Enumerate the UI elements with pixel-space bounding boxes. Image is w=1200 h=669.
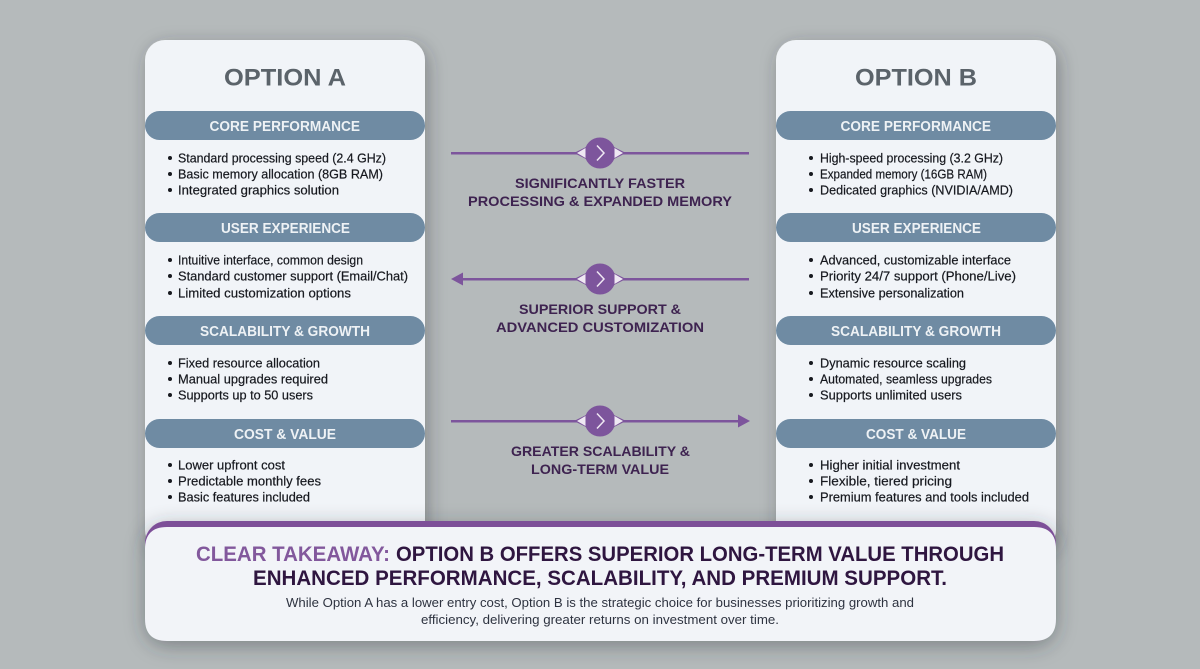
section: user experience A: Intuitive interface, common design — [178, 254, 363, 268]
takeaway headline: ENHANCED PERFORMANCE, SCALABILITY, AND PREMIUM SUPPORT. — [253, 567, 947, 590]
section: core performance A — [145, 111, 425, 198]
section: core performance B: Expanded memory (16GB RAM) — [820, 168, 987, 182]
section: core performance B: CORE PERFORMANCE — [840, 119, 991, 135]
label: connector 1: PROCESSING & EXPANDED MEMORY — [468, 193, 733, 209]
takeaway supporting text: efficiency, delivering greater returns on investment over time. — [421, 613, 779, 627]
section: user experience B: Priority 24/7 support (Phone/Live) — [820, 270, 1016, 284]
label: connector 3: LONG-TERM VALUE — [531, 461, 669, 477]
label: connector 2 — [496, 301, 704, 335]
heading: option B: OPTION B — [855, 64, 977, 92]
takeaway supporting text — [286, 596, 914, 627]
section: cost and value A: Predictable monthly fees — [178, 474, 321, 488]
section: user experience A — [145, 213, 425, 300]
section: core performance A: Standard processing speed (2.4 GHz) — [178, 152, 386, 166]
section: core performance B — [776, 111, 1056, 198]
section: cost and value B: Higher initial investment — [820, 458, 961, 472]
section: cost and value A: Basic features included — [178, 490, 310, 504]
section: cost and value B — [776, 419, 1056, 504]
section: scalability B: Automated, seamless upgrades — [820, 372, 992, 386]
section: core performance A: CORE PERFORMANCE — [210, 119, 360, 135]
section: scalability B: Supports unlimited users — [820, 388, 962, 402]
section: cost and value A: Lower upfront cost — [178, 458, 286, 472]
section: user experience B: Extensive personalization — [820, 286, 964, 300]
section: user experience B: USER EXPERIENCE — [852, 221, 981, 237]
section: scalability B: Dynamic resource scaling — [820, 356, 966, 370]
takeaway headline — [196, 543, 1004, 590]
section: core performance A: Integrated graphics solution — [178, 184, 339, 198]
section: scalability A: SCALABILITY & GROWTH — [200, 324, 370, 340]
section: scalability B: SCALABILITY & GROWTH — [831, 324, 1001, 340]
panel: option B — [776, 40, 1056, 550]
section: core performance B: High-speed processing (3.2 GHz) — [820, 152, 1003, 166]
section: cost and value B: Premium features and tools included — [820, 490, 1029, 504]
section: cost and value A — [145, 419, 425, 504]
label: connector 3 — [511, 443, 690, 477]
takeaway headline: OPTION B OFFERS SUPERIOR LONG-TERM VALUE THROUGH — [396, 543, 1004, 566]
connector 2: superior support, arrow left — [451, 264, 749, 335]
section: scalability A: Fixed resource allocation — [178, 356, 320, 370]
section: scalability A: Supports up to 50 users — [178, 388, 313, 402]
takeaway supporting text: While Option A has a lower entry cost, Option B is the strategic choice for businesses prioritizing growth and — [286, 596, 914, 610]
label: connector 1 — [468, 175, 733, 209]
label: connector 1: SIGNIFICANTLY FASTER — [515, 175, 685, 191]
section: user experience A: Limited customization options — [178, 286, 351, 300]
section: user experience A: USER EXPERIENCE — [221, 221, 350, 237]
section: scalability A: Manual upgrades required — [178, 372, 328, 386]
connector 1: faster processing — [451, 138, 749, 209]
panel: option A — [145, 40, 425, 550]
section: user experience B: Advanced, customizable interface — [820, 254, 1011, 268]
heading: option A: OPTION A — [224, 64, 346, 92]
label: connector 3: GREATER SCALABILITY & — [511, 443, 690, 459]
section: scalability A — [145, 316, 425, 402]
takeaway headline: CLEAR TAKEAWAY: — [196, 543, 390, 566]
connector 3: greater scalability, arrow right — [451, 406, 750, 477]
label: connector 2: ADVANCED CUSTOMIZATION — [496, 319, 704, 335]
section: scalability B — [776, 316, 1056, 402]
section: core performance B: Dedicated graphics (NVIDIA/AMD) — [820, 184, 1013, 198]
section: cost and value B: COST & VALUE — [866, 427, 966, 443]
section: core performance A: Basic memory allocation (8GB RAM) — [178, 168, 383, 182]
panel: clear takeaway — [145, 521, 1056, 641]
section: user experience A: Standard customer support (Email/Chat) — [178, 270, 408, 284]
section: user experience B — [776, 213, 1056, 300]
section: cost and value B: Flexible, tiered pricing — [820, 474, 952, 488]
label: connector 2: SUPERIOR SUPPORT & — [519, 301, 681, 317]
section: cost and value A: COST & VALUE — [234, 427, 336, 443]
